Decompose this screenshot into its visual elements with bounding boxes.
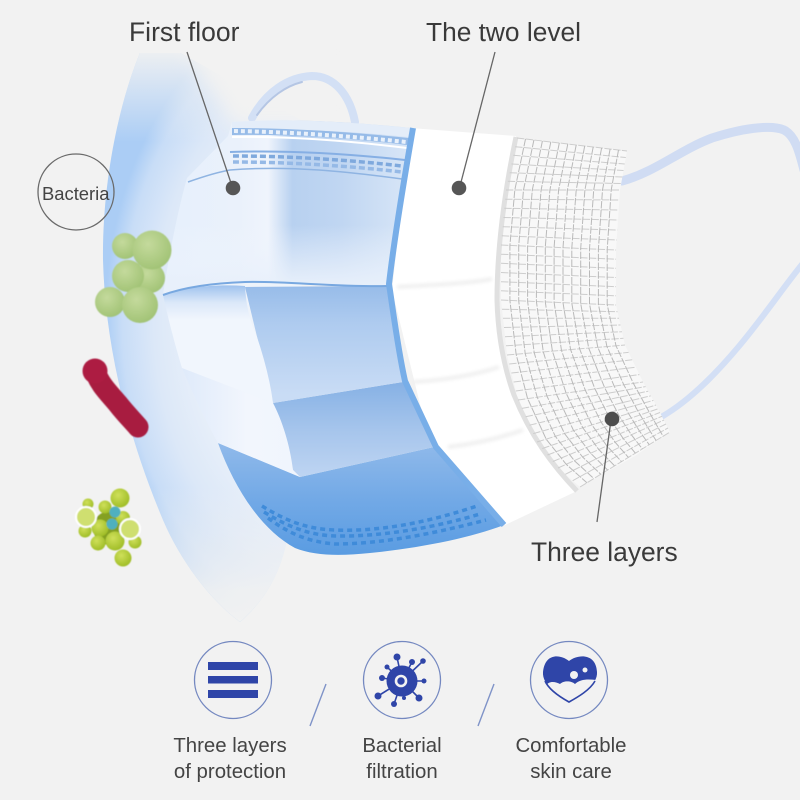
blue edge strip xyxy=(389,128,504,525)
caption: bacterial filtration: filtration xyxy=(366,761,438,783)
caption: three layers of protection: of protection xyxy=(174,761,286,783)
divider slash 1 xyxy=(310,684,326,726)
caption: comfortable skin care: skin care xyxy=(530,761,612,783)
third pleat xyxy=(273,382,434,477)
bottom blue pleat xyxy=(218,443,504,555)
bacteria label: Bacteria xyxy=(42,183,110,204)
bacteria label xyxy=(38,154,114,230)
right ear loop xyxy=(622,127,800,416)
top ear loop xyxy=(252,76,355,122)
second pleat xyxy=(245,286,403,403)
second pleat light side xyxy=(163,285,273,403)
icon: three layers xyxy=(194,642,272,718)
caption: three layers of protection xyxy=(173,735,287,783)
first pleat xyxy=(163,120,412,295)
callout: Three layers: Three layers xyxy=(531,537,678,567)
caption: comfortable skin care xyxy=(515,735,627,783)
yellow-green bacteria cluster xyxy=(76,488,142,566)
fold line xyxy=(163,282,387,295)
caption: three layers of protection: Three layers xyxy=(173,735,287,757)
callout: First floor: First floor xyxy=(129,17,240,47)
callout: The two level xyxy=(426,17,581,195)
mask mesh third layer xyxy=(497,137,670,491)
red rod bacterium xyxy=(82,358,138,427)
face shield crescent xyxy=(103,35,350,622)
mask white middle layer xyxy=(392,128,577,525)
top pleat band 1 xyxy=(232,128,409,145)
mesh grid lines xyxy=(501,138,670,487)
callout: First floor xyxy=(129,17,240,195)
callout: Three layers xyxy=(531,412,678,567)
icon: virus xyxy=(364,642,440,718)
caption: comfortable skin care: Comfortable xyxy=(515,735,627,757)
pleat ridge line xyxy=(188,168,402,182)
divider slash 2 xyxy=(478,684,494,726)
green bacteria cluster xyxy=(95,230,172,323)
third pleat light side xyxy=(182,368,300,477)
icon: heart skin care xyxy=(530,642,608,718)
callout: The two level: The two level xyxy=(426,17,581,47)
caption: bacterial filtration: Bacterial xyxy=(362,735,442,757)
caption: bacterial filtration xyxy=(362,735,442,783)
top pleat band 2 xyxy=(230,151,405,160)
mask blue front layer xyxy=(163,120,504,555)
bottom pleat dashes xyxy=(262,506,477,530)
